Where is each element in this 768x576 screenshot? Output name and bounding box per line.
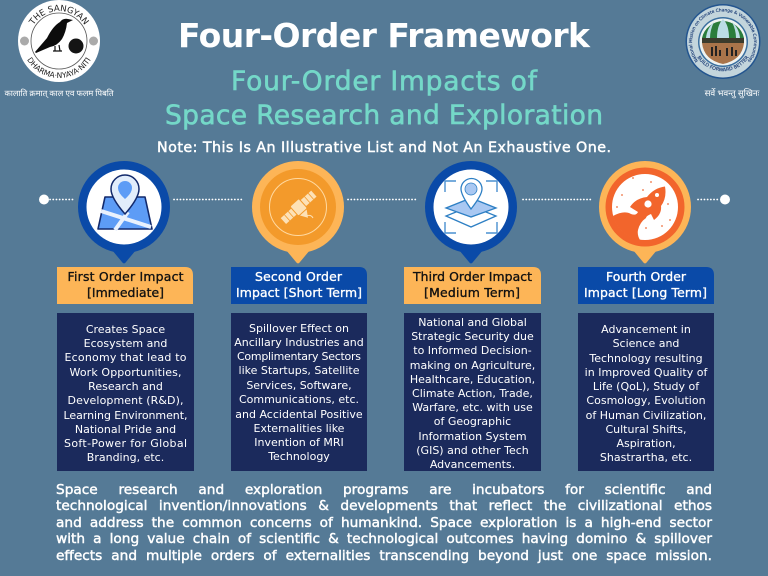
panel: fourth order description: [578, 313, 714, 471]
panel: first order description: National Pride and: [75, 423, 176, 436]
logo: The Sangyan: [18, 0, 100, 82]
panel: second order description: Services, Software,: [246, 379, 352, 392]
marker 1: map icon: [78, 161, 170, 264]
panel: first order description: Ecosystem and: [84, 337, 167, 350]
panel: fourth order description: Shastrartha, etc.: [600, 451, 692, 464]
panel: second order description: and Accidental Positive: [235, 408, 363, 421]
panel: second order description: Complimentary Sectors: [237, 350, 361, 363]
subtitle: [165, 66, 603, 131]
panel: first order description: Branding, etc.: [87, 451, 164, 464]
panel: first order description: Economy that lead to: [64, 351, 187, 364]
panel: third order description: of Geographic: [434, 415, 511, 428]
header: fourth order: Impact [Long Term]: [584, 285, 707, 300]
panel: first order description: Soft-Power for Global: [64, 437, 187, 450]
panel: second order description: Externalities like: [254, 422, 345, 435]
title: Four-Order Framework: [178, 16, 591, 55]
panel: third order description: [404, 313, 541, 471]
panel: third order description: Healthcare, Education,: [410, 373, 535, 386]
panel: third order description: to Informed Decision-: [413, 344, 532, 357]
summary paragraph: effects and multiple orders of externalities transcending beyond just one space mission.: [56, 548, 712, 564]
panel: first order description: Learning Environment,: [64, 409, 188, 422]
panel: fourth order description: Technology resulting: [588, 352, 703, 365]
header: fourth order: Fourth Order: [606, 269, 687, 284]
panel: first order description: [57, 313, 194, 471]
subtitle: Space Research and Exploration: [165, 100, 603, 131]
panel: first order description: Research and: [88, 380, 163, 393]
panel: second order description: Invention of MRI: [254, 436, 344, 449]
panel: third order description: Climate Action, Trade,: [412, 387, 533, 400]
panel: fourth order description: in Improved Quality of: [585, 366, 708, 379]
logo caption right: सर्वे भवन्तु सुखिनः: [705, 88, 760, 99]
summary paragraph: technological invention/innovations & developments that reflect the civilizational ethos: [56, 498, 712, 514]
panel: fourth order description: Aspiration,: [616, 437, 676, 450]
logo: The Sangyan: DHARMA·NYAYA·NITI: [27, 57, 90, 78]
summary paragraph: [56, 482, 712, 564]
panel: fourth order description: Science and: [613, 337, 679, 350]
panel: second order description: like Startups, Satellite: [239, 364, 360, 377]
panel: third order description: Warfare, etc. with use: [412, 401, 533, 414]
header: first order: [Immediate]: [87, 285, 164, 300]
header: third order: [404, 267, 541, 304]
header: second order: [231, 267, 367, 304]
panel: third order description: National and Global: [418, 316, 527, 329]
header: second order: Impact [Short Term]: [236, 285, 362, 300]
panel: fourth order description: of Human Civilization,: [586, 409, 706, 422]
logo: National Mission on Climate Change: BUILD FORWARD BETTER: [697, 56, 749, 72]
panel: third order description: Advancements.: [430, 458, 515, 471]
panel: fourth order description: Cosmology, Evolution: [586, 394, 706, 407]
header: fourth order: [578, 267, 714, 304]
summary paragraph: and address the common concerns of humankind. Space exploration is a high-end sector: [56, 515, 712, 531]
summary paragraph: Space research and exploration programs are incubators for scientific and: [56, 482, 712, 498]
panel: second order description: Ancillary Industries and: [234, 336, 364, 349]
panel: second order description: Spillover Effect on: [249, 322, 349, 335]
header: third order: [Medium Term]: [424, 285, 520, 300]
header: third order: Third Order Impact: [412, 269, 532, 284]
panel: fourth order description: Advancement in: [601, 323, 691, 336]
subtitle: Four-Order Impacts of: [231, 66, 538, 97]
logo: National Mission on Climate Change: National Mission on Climate Change & Vulnerable Communities: [688, 8, 756, 63]
logo: National Mission on Climate Change: [686, 4, 760, 79]
note: Note: This Is An Illustrative List and Not An Exhaustive One.: [157, 140, 611, 156]
header: second order: Second Order: [255, 269, 343, 284]
header: first order: [57, 267, 193, 304]
marker 3: location layers icon: [425, 161, 517, 264]
panel: fourth order description: Life (QoL), Study of: [593, 380, 700, 393]
panel: third order description: Information System: [418, 430, 527, 443]
header: first order: First Order Impact: [68, 269, 184, 284]
panel: second order description: Technology: [267, 450, 330, 463]
panel: third order description: Strategic Security due: [411, 330, 534, 343]
icon: crow: [35, 19, 73, 53]
panel: second order description: [231, 313, 367, 471]
panel: first order description: Creates Space: [86, 323, 165, 336]
panel: third order description: making on Agriculture,: [410, 359, 535, 372]
panel: second order description: Communications, etc.: [239, 393, 359, 406]
panel: first order description: Development (R&D),: [68, 394, 184, 407]
summary paragraph: with a long value chain of scientific & technological outcomes having domino & spillover: [56, 531, 712, 547]
marker 2: satellite icon: [252, 161, 344, 264]
marker 4: rocket icon: [599, 161, 691, 264]
panel: third order description: (GIS) and other Tech: [416, 444, 529, 457]
panel: first order description: Work Opportunities,: [70, 366, 182, 379]
logo: The Sangyan: THE SANGYAN: [28, 4, 90, 24]
logo caption left: कालाति क्रमात् काल एव फलम पिबति: [4, 88, 114, 99]
timeline dotted line: [39, 194, 730, 204]
panel: fourth order description: Cultural Shifts,: [605, 423, 687, 436]
